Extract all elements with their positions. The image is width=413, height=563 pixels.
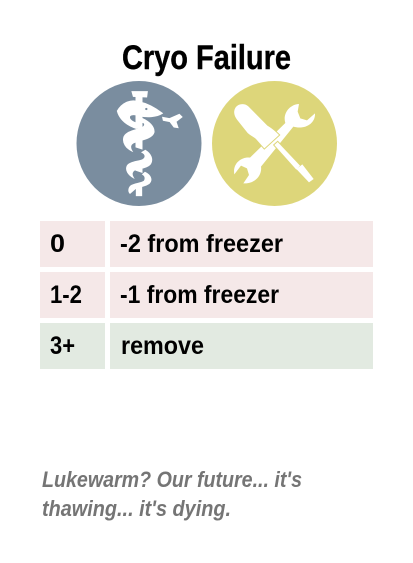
title: Cryo Failure xyxy=(122,39,291,77)
row: 0: -2 from freezer xyxy=(120,230,283,258)
row: 3+ xyxy=(40,323,373,369)
table xyxy=(40,221,373,369)
row: 0: 0 xyxy=(50,230,65,258)
flavor text: Lukewarm? Our future... it's xyxy=(42,467,302,492)
row: 1-2: -1 from freezer xyxy=(120,281,279,309)
icon: medical staff with snake xyxy=(76,81,202,206)
row: 3+: remove xyxy=(121,332,204,360)
row: 1-2 xyxy=(40,272,373,318)
flavor text: thawing... it's dying. xyxy=(42,496,231,521)
row: 0 xyxy=(40,221,373,267)
flavor text xyxy=(42,467,302,521)
row: 1-2: 1-2 xyxy=(50,281,82,309)
icon: wrench and screwdriver xyxy=(212,81,337,206)
row: 3+: 3+ xyxy=(50,332,75,360)
